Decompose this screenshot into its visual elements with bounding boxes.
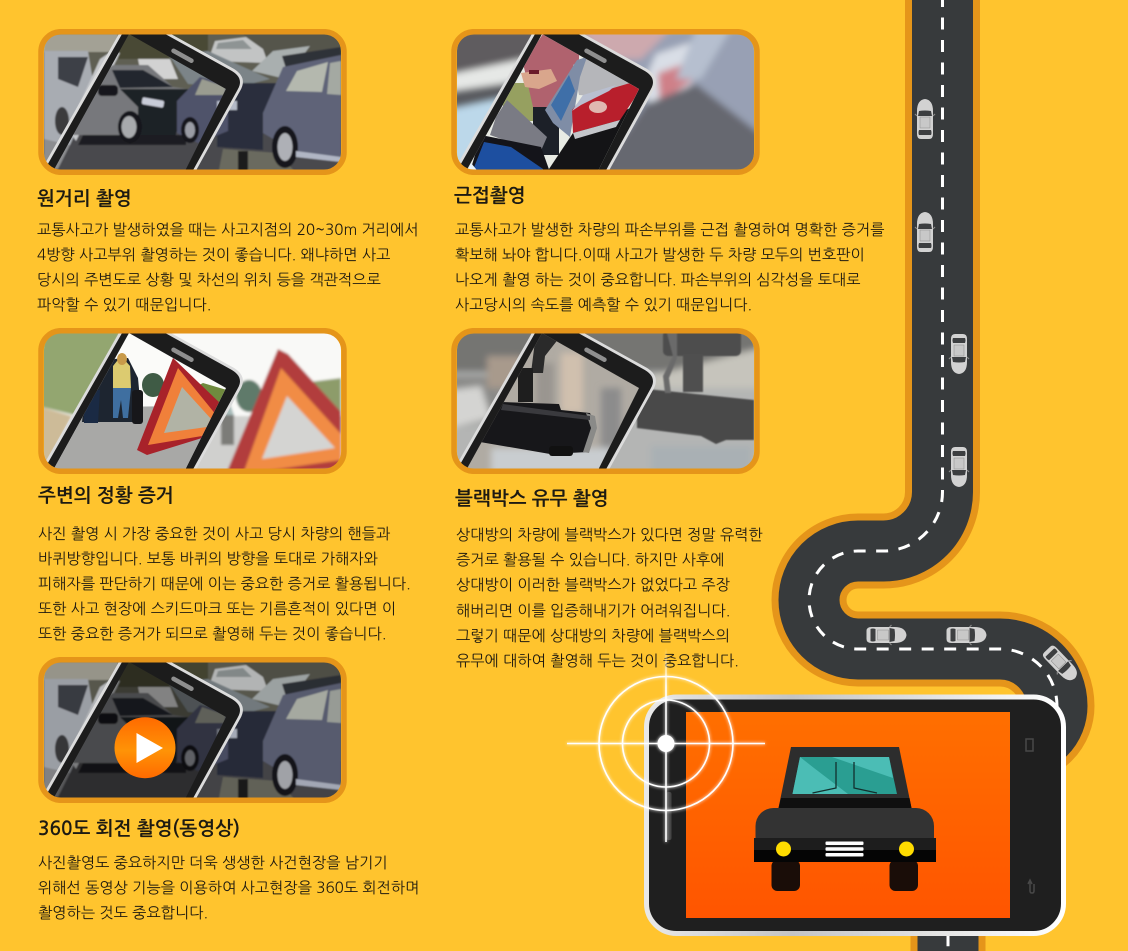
heading: dash cam: 블랙박스 유무 촬영	[455, 489, 609, 508]
text: surrounding evidence: 피해자를 판단하기 때문에 이는 중요한 증거로 활용됩니다.	[38, 577, 411, 592]
panel: close-up shot photo	[451, 29, 760, 175]
text: long-distance shot: 4방향 사고부위 촬영하는 것이 좋습니다. 왜냐하면 사고	[37, 248, 390, 263]
text: close-up shot: 확보해 놔야 합니다.이때 사고가 발생한 두 차량 모두의 번호판이	[455, 248, 865, 263]
text: close-up shot: 나오게 촬영 하는 것이 중요합니다. 파손부위의 심각성을 토대로	[455, 273, 861, 288]
text: long-distance shot: 당시의 주변도로 상황 및 차선의 위치 등을 객관적으로	[37, 273, 381, 288]
text: surrounding evidence: 또한 중요한 증거가 되므로 촬영해 두는 것이 좋습니다.	[38, 627, 386, 642]
text: long-distance shot: 파악할 수 있기 때문입니다.	[37, 298, 211, 313]
text: long-distance shot: 교통사고가 발생하였을 때는 사고지점의 20~30m 거리에서	[37, 223, 419, 238]
text: dash cam: 상대방이 이러한 블랙박스가 없었다고 주장	[456, 578, 730, 593]
text: close-up shot: 사고당시의 속도를 예측할 수 있기 때문입니다.	[455, 298, 752, 313]
phone icons	[1026, 739, 1034, 893]
panel: surrounding evidence photo	[38, 328, 347, 474]
phone side button	[666, 792, 672, 840]
text: 360-degree video: 위해선 동영상 기능을 이용하여 사고현장을 360도 회전하며	[38, 881, 419, 896]
text: close-up shot	[455, 222, 885, 313]
text: 360-degree video: 촬영하는 것도 중요합니다.	[38, 906, 208, 921]
heading: surrounding evidence: 주변의 정황 증거	[38, 486, 174, 505]
panel: 360-degree video thumbnail with play button	[38, 657, 347, 803]
icon: play button	[114, 717, 176, 778]
text: 360-degree video	[38, 855, 419, 921]
phone screen	[686, 712, 1010, 918]
text: dash cam: 그렇기 때문에 상대방의 차량에 블랙박스의	[456, 629, 730, 644]
heading: 360-degree video: 360도 회전 촬영(동영상)	[38, 819, 240, 838]
text: dash cam: 상대방의 차량에 블랙박스가 있다면 정말 유력한	[456, 528, 763, 543]
panel: long-distance shot photo	[38, 29, 347, 175]
text: surrounding evidence: 사진 촬영 시 가장 중요한 것이 사고 당시 차량의 핸들과	[38, 527, 390, 542]
heading: close-up shot: 근접촬영	[454, 186, 525, 205]
panel: dash cam photo	[451, 328, 760, 474]
text: 360-degree video: 사진촬영도 중요하지만 더욱 생생한 사건현장을 남기기	[38, 856, 388, 871]
text: dash cam: 증거로 활용될 수 있습니다. 하지만 사후에	[456, 553, 725, 568]
text: close-up shot: 교통사고가 발생한 차량의 파손부위를 근접 촬영하여 명확한 증거를	[455, 223, 885, 238]
heading: long-distance shot: 원거리 촬영	[37, 189, 132, 208]
car illustration	[754, 747, 936, 891]
target crosshair	[567, 648, 765, 842]
text: dash cam	[456, 527, 763, 669]
phone body	[646, 697, 1064, 934]
text: surrounding evidence	[38, 526, 411, 642]
text: surrounding evidence: 바퀴방향입니다. 보통 바퀴의 방향을 토대로 가해자와	[38, 552, 378, 567]
text: dash cam: 유무에 대하여 촬영해 두는 것이 중요합니다.	[456, 654, 739, 669]
text: dash cam: 해버리면 이를 입증해내기가 어려워집니다.	[456, 604, 730, 619]
text: long-distance shot	[37, 222, 419, 313]
text: surrounding evidence: 또한 사고 현장에 스키드마크 또는 기름흔적이 있다면 이	[38, 602, 396, 617]
